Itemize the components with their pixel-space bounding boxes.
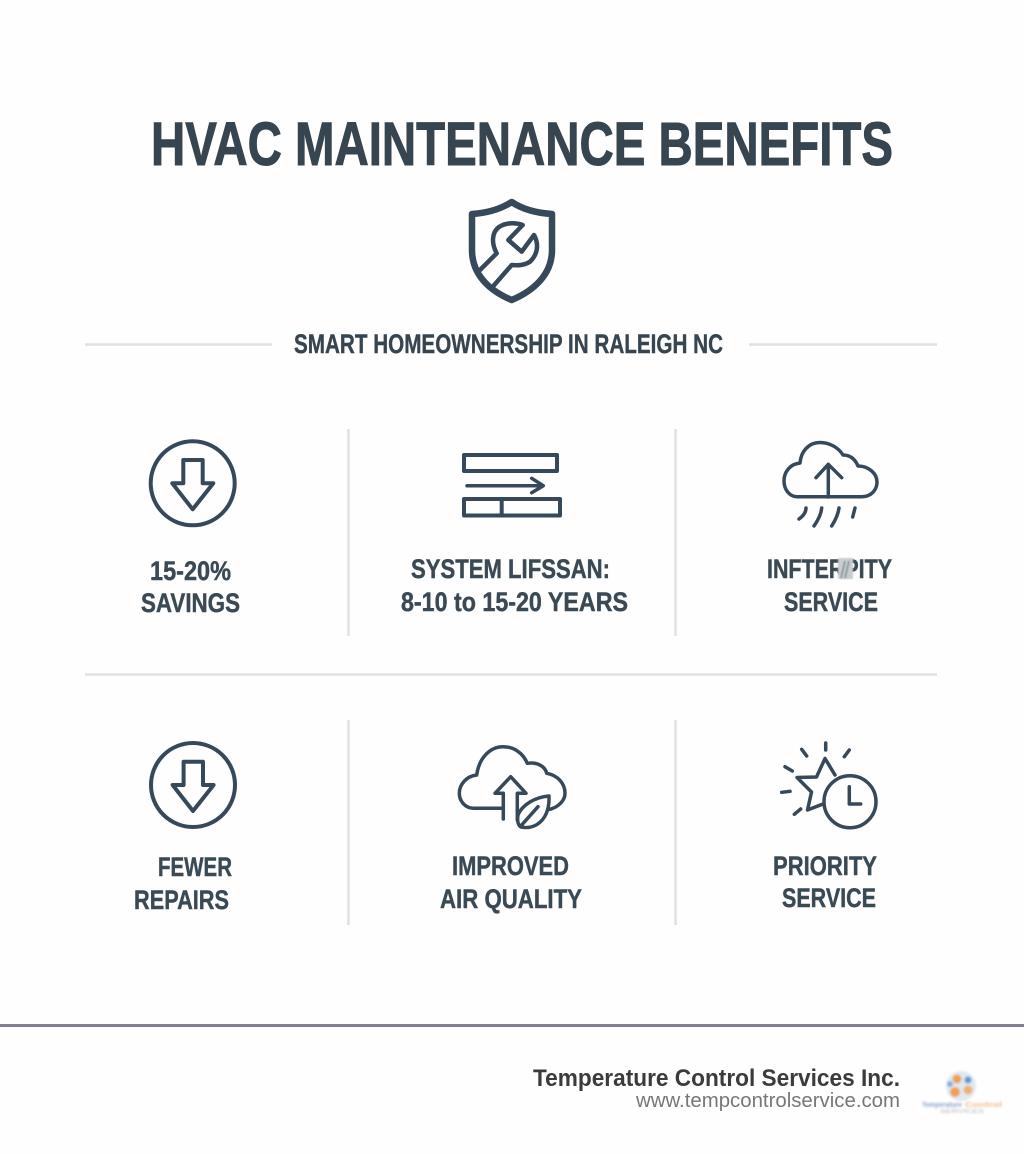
label: infterpity service (767, 554, 892, 617)
panel: savings (141, 441, 240, 618)
icon: company logo: Control (965, 1102, 1002, 1109)
footer: company name and website: www.tempcontrolservice.com (635, 1090, 900, 1112)
label: fewer repairs: FEWER (158, 852, 232, 882)
icon: company logo: Temperature (922, 1102, 962, 1109)
label: infterpity service: SERVICE (784, 587, 878, 617)
footer: company name and website: Temperature Control Services Inc. (533, 1065, 900, 1092)
icon: company logo (922, 1071, 1002, 1115)
panel: infterpity service (767, 442, 892, 617)
icon: star with clock (782, 743, 876, 828)
footer: company name and website (533, 1065, 900, 1112)
icon: down arrow in circle (151, 743, 235, 827)
label: fewer repairs: REPAIRS (134, 885, 229, 915)
label: system lifespan (401, 554, 628, 617)
icon: cloud with arrow and leaf (459, 747, 565, 828)
icon: cloud with up arrow and rain (784, 442, 877, 526)
label: system lifespan: 8-10 to 15-20 YEARS (401, 587, 628, 617)
panel: priority service (773, 743, 877, 913)
icon: company logo: SERVICES (940, 1109, 985, 1115)
label: savings: 15-20% (150, 556, 231, 586)
panel: improved air quality (440, 747, 582, 914)
label: infterpity service: INFTERPITY (767, 554, 892, 584)
grid dividers (85, 429, 937, 925)
label: priority service (773, 851, 877, 913)
label: savings (141, 556, 240, 618)
icon: bars with arrow (464, 455, 560, 516)
label: priority service: SERVICE (782, 883, 876, 913)
panel: fewer repairs (134, 743, 235, 915)
label: priority service: PRIORITY (773, 851, 877, 881)
label: savings: SAVINGS (141, 588, 240, 618)
icon: shield with wrench (472, 202, 552, 300)
label: improved air quality: IMPROVED (452, 851, 569, 881)
label: system lifespan: SYSTEM LIFSSAN: (411, 554, 610, 584)
icon: down arrow in circle (151, 441, 235, 525)
label: improved air quality (440, 851, 582, 914)
label: improved air quality: AIR QUALITY (440, 884, 582, 914)
panel: system lifespan (401, 455, 628, 617)
subtitle with flanking rules: SMART HOMEOWNERSHIP IN RALEIGH NC (294, 329, 723, 359)
footer rule (0, 1024, 1024, 1027)
label: fewer repairs (134, 852, 232, 915)
